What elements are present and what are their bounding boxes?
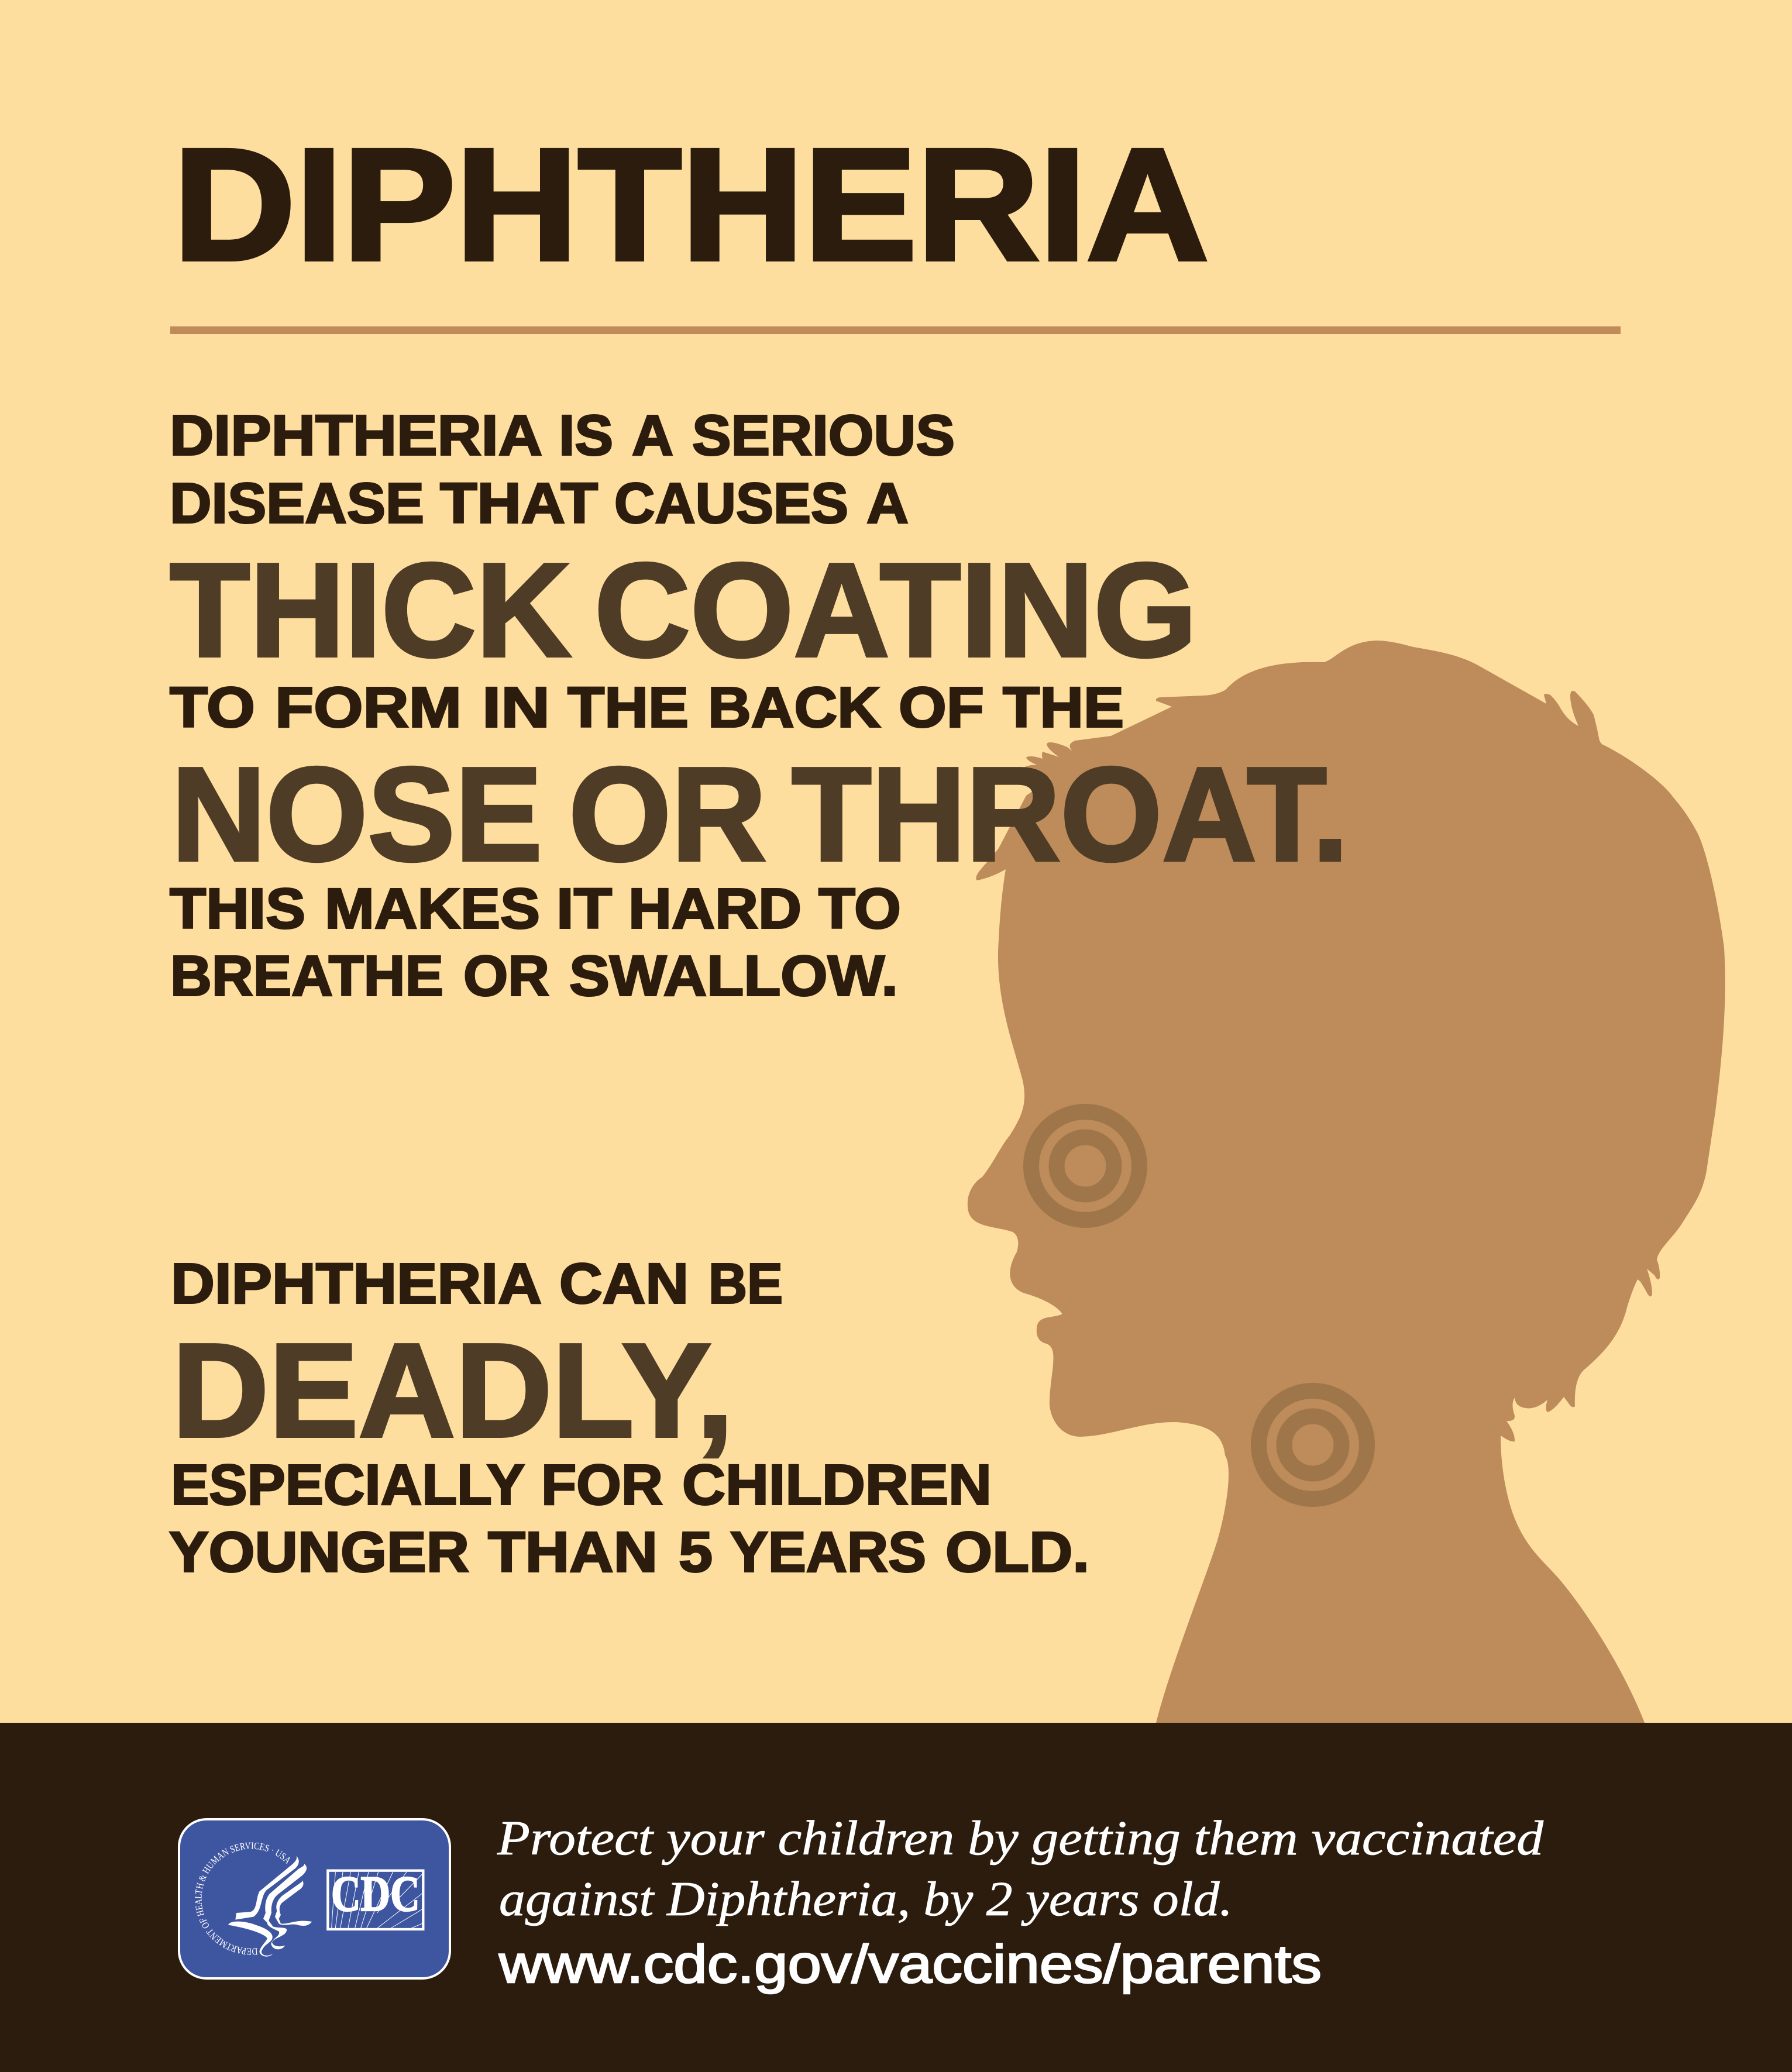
footer message: against Diphtheria, by 2 years old. [499,1872,1233,1926]
text block: what diphtheria is: HARD [628,876,802,941]
text block: what diphtheria is: MAKES [325,876,540,941]
text block: what diphtheria is: OF [899,675,984,739]
text block: what diphtheria is: THE [1003,675,1124,739]
text block: what diphtheria is: IN [482,675,550,739]
text block: what diphtheria is: CAUSES [614,471,848,535]
text block: what diphtheria is: DISEASE [170,471,424,535]
footer message [497,1811,1544,1926]
logo: HHS eagle [228,1856,312,1957]
text block: what diphtheria is: COATING [594,536,1197,684]
text block: what diphtheria is: THE [567,675,689,739]
text block: what diphtheria is: NOSE [171,741,542,889]
title divider [170,326,1621,334]
text block: what diphtheria is: IS [559,404,613,467]
text block: what diphtheria is: SERIOUS [692,404,955,467]
text block: what diphtheria is: SWALLOW. [569,944,898,1007]
illustration: child head silhouette [968,641,1725,1723]
logo: HHS and CDC [178,1818,451,1980]
logo: CDC mark: CDC [331,1866,420,1922]
text block: what diphtheria is: THROAT. [792,741,1349,889]
text block: deadly for children: THAN [488,1520,658,1584]
text block: deadly for children: DEADLY, [172,1316,734,1465]
footer message: Protect your children by getting them vaccinated [497,1811,1544,1866]
text block: deadly for children: DIPHTHERIA [171,1252,542,1315]
text block: deadly for children: OLD. [945,1520,1089,1584]
text block: what diphtheria is: FORM [275,675,462,739]
icon: nose infection rings [1031,1111,1140,1220]
text block: what diphtheria is: BACK [708,675,880,739]
text block: deadly for children: YEARS [730,1520,926,1584]
footer URL: www.cdc.gov/vaccines/parents [498,1935,1322,1994]
text block: what diphtheria is: BREATHE [170,944,443,1007]
text block: what diphtheria is: TO [170,675,255,739]
text block: deadly for children: CHILDREN [682,1453,992,1516]
text block: deadly for children [169,1252,1089,1584]
icon: throat infection rings [1259,1391,1367,1499]
text block: deadly for children: YOUNGER [169,1520,469,1584]
text block: deadly for children: FOR [541,1453,663,1516]
title: DIPHTHERIA [173,116,1209,294]
text block: what diphtheria is: IT [556,876,612,941]
text block: deadly for children: BE [708,1252,783,1315]
text block: what diphtheria is: A [866,471,909,535]
text block: what diphtheria is [170,404,1349,1007]
text block: deadly for children: CAN [559,1252,689,1315]
text block: deadly for children: 5 [679,1520,713,1584]
text block: what diphtheria is: THAT [440,471,598,535]
text block: what diphtheria is: THIS [170,876,305,941]
text block: what diphtheria is: DIPHTHERIA [170,404,542,467]
text block: deadly for children: ESPECIALLY [171,1453,525,1516]
footer band [0,1723,1792,2072]
text block: what diphtheria is: OR [463,944,549,1007]
text block: what diphtheria is: TO [818,876,901,941]
text block: what diphtheria is: THICK [170,536,571,684]
logo: HHS circular wordmark: DEPARTMENT OF HEALTH & HUMAN SERVICES · USA [195,1842,290,1955]
text block: what diphtheria is: A [632,404,673,467]
text block: what diphtheria is: OR [569,741,766,889]
